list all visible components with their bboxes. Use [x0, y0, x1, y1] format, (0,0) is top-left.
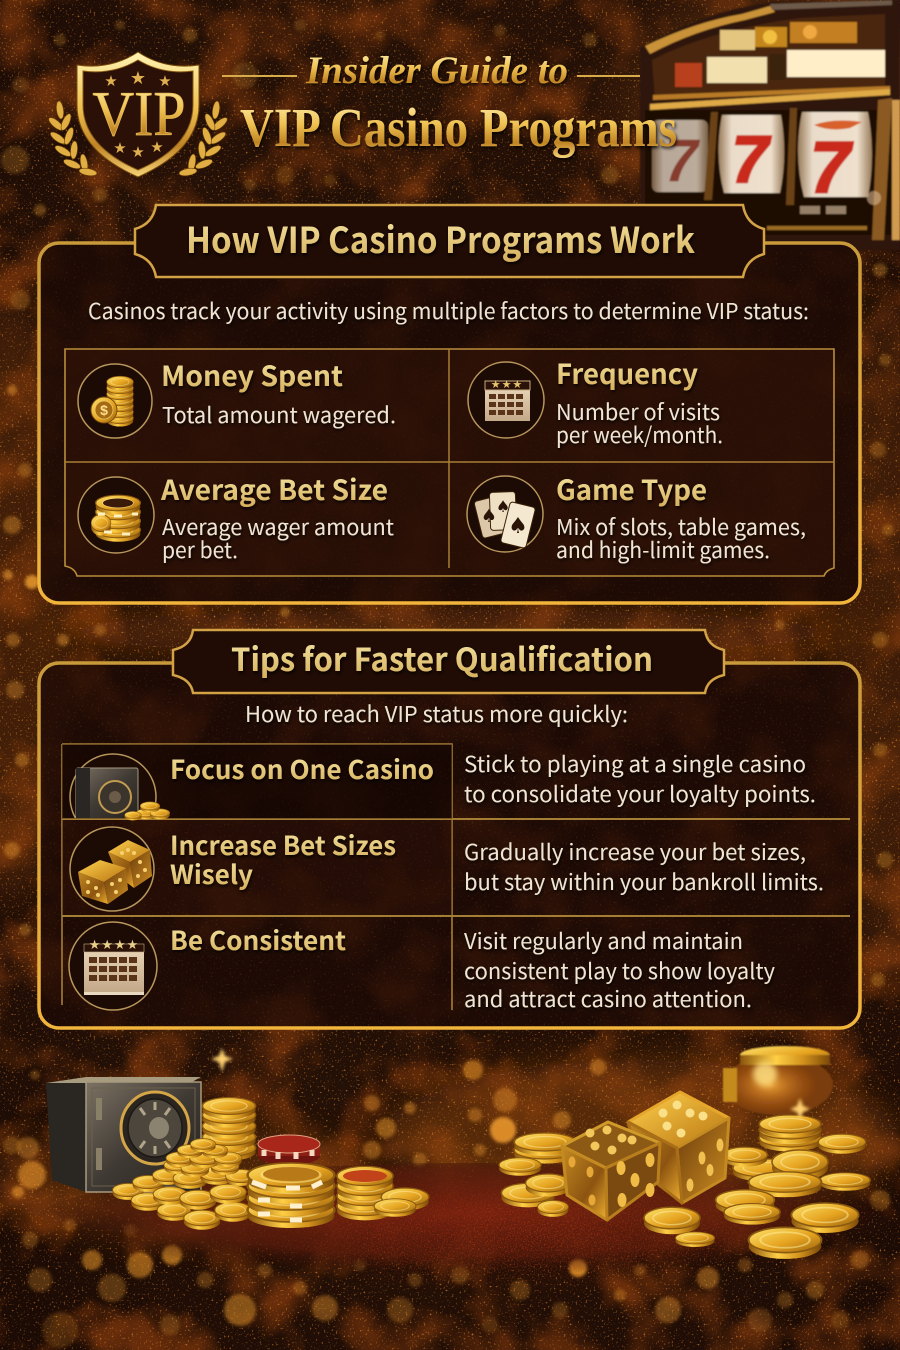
icon: playing cards: ♠: [508, 514, 528, 539]
logo: VIP shield with laurels: ★: [104, 74, 118, 90]
tip: increase bet sizes wisely: but stay within your bankroll limits.: [464, 865, 824, 897]
tip: be consistent: and attract casino attention.: [464, 982, 752, 1014]
bokeh lights: [1, 19, 894, 987]
illustration: safe and gold pile: [46, 1077, 429, 1230]
title: VIP Casino Programs: [240, 97, 677, 158]
tip: increase bet sizes wisely: Increase Bet Sizes: [170, 826, 396, 863]
panel: tips for faster qualification: [39, 630, 860, 1028]
slot machine illustration: [640, 0, 900, 250]
factor: game type: and high-limit games.: [556, 533, 770, 565]
floor bokeh: [3, 1059, 890, 1348]
tip: increase bet sizes wisely: Gradually increase your bet sizes,: [464, 835, 806, 867]
icon: safe: [69, 753, 157, 818]
factor: money spent: Total amount wagered.: [162, 398, 396, 430]
logo: VIP shield with laurels: [47, 52, 229, 177]
factor: average bet size: per bet.: [162, 533, 238, 565]
logo: VIP shield with laurels: VIP: [92, 78, 186, 149]
tip: focus on one casino: [69, 753, 815, 820]
intro text: How to reach VIP status more quickly:: [245, 697, 628, 729]
tips table: [62, 744, 850, 1014]
tip: be consistent: [69, 921, 776, 1014]
coins left of dice: [499, 1133, 576, 1217]
tip: focus on one casino: to consolidate your loyalty points.: [464, 777, 816, 809]
factor: frequency: [468, 353, 723, 450]
gold chip stack: [248, 1163, 334, 1228]
safe: [46, 1077, 201, 1192]
logo: VIP shield with laurels: ★: [131, 145, 145, 161]
icon: calendar: ★★★★: [89, 938, 139, 953]
logo: VIP shield with laurels: ★: [158, 74, 172, 90]
heading ribbon: how programs work: How VIP Casino Programs Work: [186, 212, 695, 264]
title: Insider Guide to: [305, 49, 568, 92]
coin pile: [113, 1139, 256, 1230]
slot machine illustration: 7: [664, 127, 700, 194]
coins right of dice: [644, 1115, 870, 1259]
tip: be consistent: Visit regularly and maintain: [464, 924, 743, 956]
tip: increase bet sizes wisely: Wisely: [170, 855, 253, 892]
front die: [562, 1122, 660, 1220]
factor: average bet size: [78, 469, 394, 565]
factor: frequency: Number of visits: [556, 395, 720, 427]
panel: how VIP casino programs work: [39, 205, 860, 603]
factors grid: [65, 349, 834, 576]
factor: money spent: [78, 355, 396, 438]
factor: frequency: Frequency: [556, 353, 698, 393]
heading ribbon: how programs work: [135, 205, 764, 277]
icon: playing cards: ♠: [481, 506, 497, 527]
red chips: [258, 1135, 320, 1165]
logo: VIP shield with laurels: ★: [113, 141, 127, 157]
title: [222, 49, 677, 158]
icon: playing cards: ♠: [496, 497, 510, 516]
icon: laurel right: [179, 101, 229, 177]
tip: be consistent: consistent play to show loyalty: [464, 954, 776, 986]
table felt: [30, 1163, 900, 1300]
jar of gold: [722, 1046, 833, 1115]
logo: VIP shield with laurels: ★: [130, 68, 146, 88]
icon: playing cards: [467, 476, 543, 552]
tip: be consistent: Be Consistent: [170, 921, 346, 958]
icon: calendar: [468, 362, 544, 438]
icon: laurel left: [47, 101, 97, 177]
slot machine illustration: 7: [732, 122, 772, 196]
icon: coin stack: $: [100, 402, 108, 418]
icon: dice: [70, 827, 154, 911]
factor: average bet size: Average wager amount: [162, 510, 394, 542]
tip: focus on one casino: Focus on One Casino: [170, 750, 434, 787]
intro text: Casinos track your activity using multiple factors to determine VIP status:: [88, 294, 809, 326]
coin stack behind safe: [202, 1098, 256, 1161]
gold chips with red top: [337, 1166, 429, 1220]
factor: game type: Game Type: [556, 469, 707, 509]
logo: VIP shield with laurels: ★: [150, 140, 164, 156]
icon: chip stack: [78, 477, 154, 553]
sparkles: [211, 1048, 810, 1120]
icon: coin stack: [78, 364, 152, 438]
factor: game type: Mix of slots, table games,: [556, 510, 806, 542]
factor: money spent: Money Spent: [161, 355, 343, 395]
heading ribbon: tips: Tips for Faster Qualification: [231, 635, 653, 681]
slot machine illustration: 7: [810, 128, 853, 208]
back die: [628, 1092, 729, 1203]
tip: increase bet sizes wisely: [70, 826, 824, 911]
lit reel windows: [675, 22, 885, 87]
icon: calendar: [69, 922, 157, 1010]
heading ribbon: tips: [173, 630, 724, 693]
illustration: dice and coins: [499, 1046, 870, 1259]
factor: game type: [467, 469, 806, 565]
factor: average bet size: Average Bet Size: [160, 469, 388, 509]
tip: focus on one casino: Stick to playing at a single casino: [464, 747, 806, 779]
factor: frequency: per week/month.: [556, 418, 723, 450]
icon: calendar: ★★★: [491, 378, 523, 391]
